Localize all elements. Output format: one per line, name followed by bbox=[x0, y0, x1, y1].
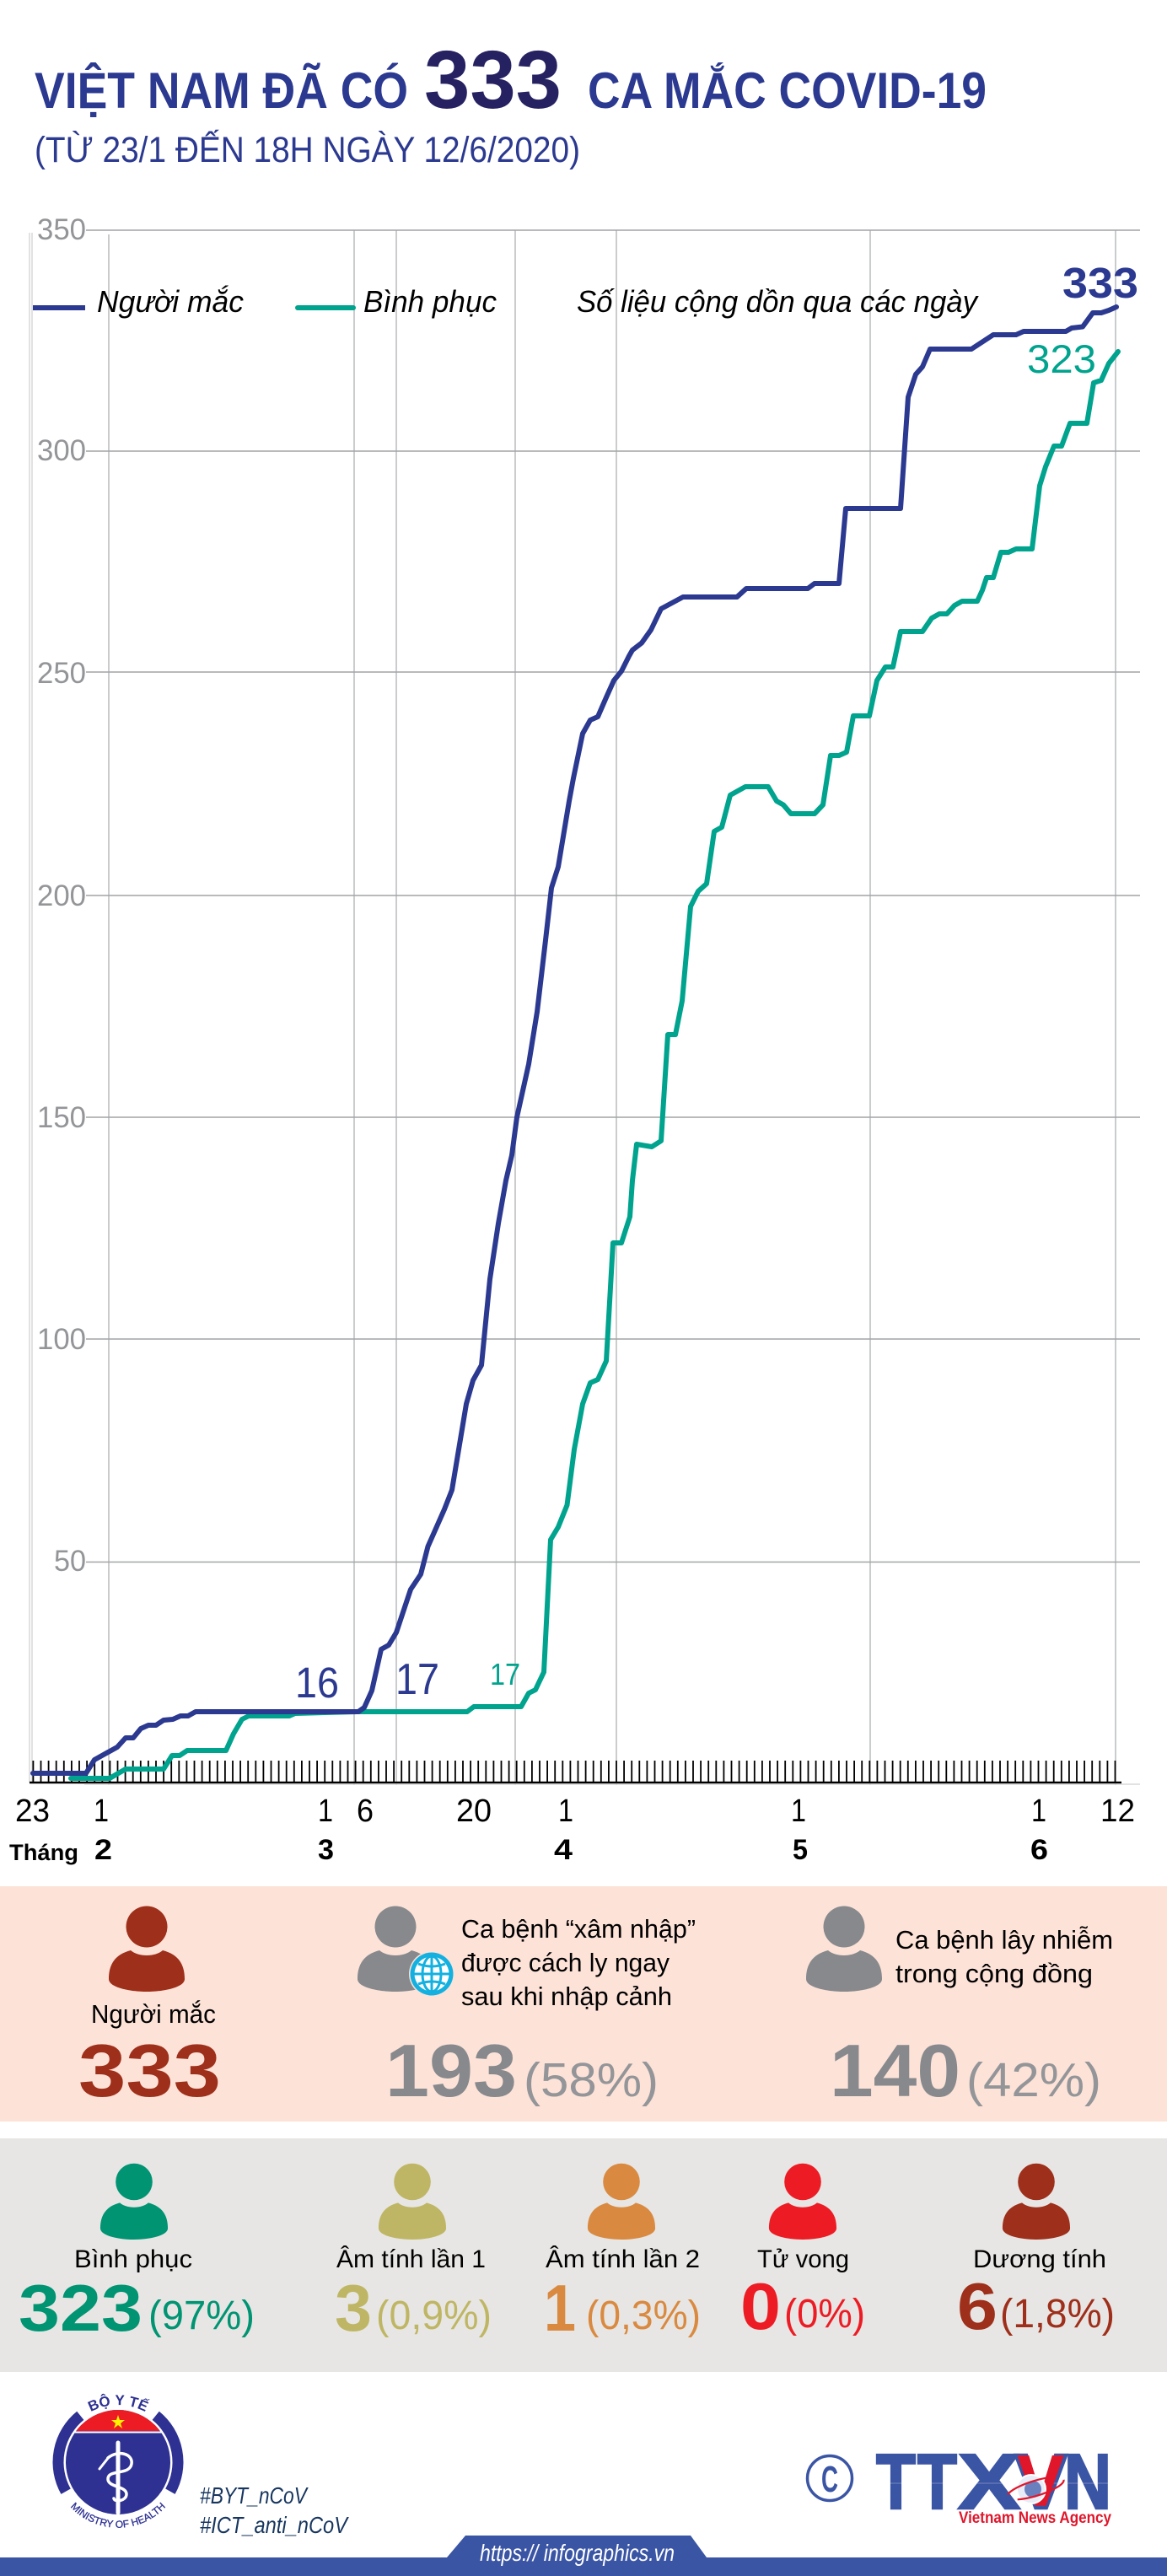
text: imported cases: Ca bệnh “xâm nhập” bbox=[461, 1914, 696, 1944]
logo: ministry of health bbox=[52, 2393, 184, 2528]
number: 193 bbox=[385, 2029, 659, 2112]
stat: negative twice: 1 bbox=[544, 2271, 576, 2345]
stat: negative twice: (0,3%) bbox=[586, 2294, 701, 2338]
x axis day labels: 6 bbox=[357, 1794, 374, 1829]
text: community cases bbox=[895, 1925, 1113, 1988]
logo: TTXVN: Vietnam News Agency bbox=[959, 2509, 1111, 2527]
stat: positive: (1,8%) bbox=[1000, 2292, 1115, 2337]
x axis month labels bbox=[9, 1834, 1048, 1866]
number: 140: 140 bbox=[830, 2029, 960, 2112]
logo: ministry of health: MINISTRY OF HEALTH bbox=[71, 2503, 165, 2528]
x axis month labels: Tháng bbox=[9, 1840, 78, 1865]
hashtags bbox=[200, 2482, 349, 2538]
panel: total cases bbox=[0, 1886, 1167, 2122]
stat: recovered bbox=[19, 2164, 255, 2345]
line chart bbox=[9, 213, 1140, 1866]
number: 333: 333 bbox=[78, 2029, 221, 2112]
logo: TTXVN: X bbox=[958, 2438, 1020, 2525]
x axis day labels: 12 bbox=[1100, 1794, 1135, 1829]
x axis month labels: 2 bbox=[94, 1834, 112, 1866]
x axis ticks bbox=[30, 1772, 1140, 1784]
number: 140 bbox=[830, 2029, 1101, 2112]
icon: copyright bbox=[808, 2455, 852, 2501]
y axis labels: 100 bbox=[37, 1323, 86, 1356]
icon: person with globe bbox=[358, 1906, 454, 1997]
y axis labels: 300 bbox=[37, 434, 86, 467]
x axis day labels: 1 bbox=[1031, 1794, 1046, 1829]
text: imported cases bbox=[461, 1914, 696, 2011]
x axis day labels: 1 bbox=[791, 1794, 806, 1829]
hashtags: #ICT_anti_nCoV bbox=[200, 2512, 349, 2538]
title: VIỆT NAM ĐÃ CÓ bbox=[35, 62, 408, 119]
x axis day labels bbox=[15, 1794, 1135, 1829]
title bbox=[35, 34, 987, 126]
title: CA MẮC COVID-19 bbox=[588, 62, 987, 119]
website url: https:// infographics.vn bbox=[480, 2540, 675, 2566]
number: 140: (42%) bbox=[966, 2053, 1101, 2107]
text: imported cases: được cách ly ngay bbox=[461, 1948, 670, 1977]
panel: outcomes bbox=[0, 2138, 1167, 2372]
logo: TTXVN bbox=[876, 2438, 1111, 2527]
chart note: Số liệu cộng dồn qua các ngày bbox=[577, 284, 979, 319]
subtitle: (TỪ 23/1 ĐẾN 18H NGÀY 12/6/2020) bbox=[35, 130, 580, 170]
stat: negative once: (0,9%) bbox=[376, 2294, 492, 2338]
value label 333: 333 bbox=[1062, 259, 1138, 307]
stat: negative once: Âm tính lần 1 bbox=[336, 2245, 486, 2273]
icon: copyright: C bbox=[821, 2459, 838, 2500]
logo: ministry of health: BỘ Y TẾ bbox=[88, 2393, 150, 2412]
icon: person red bbox=[109, 1906, 185, 1992]
text: community cases: trong cộng đồng bbox=[895, 1959, 1093, 1988]
value label 16: 16 bbox=[295, 1659, 339, 1707]
line: recovered bbox=[71, 352, 1118, 1778]
stat: deaths: Tử vong bbox=[757, 2245, 849, 2273]
stat: positive bbox=[957, 2164, 1115, 2343]
number: 193: (58%) bbox=[524, 2053, 659, 2107]
y axis labels bbox=[37, 213, 86, 1578]
value label 323: 323 bbox=[1027, 336, 1096, 381]
x axis day labels: 1 bbox=[94, 1794, 109, 1829]
line: cases bbox=[33, 307, 1116, 1773]
x axis month labels: 3 bbox=[318, 1834, 334, 1866]
icon: person gray bbox=[806, 1906, 882, 1992]
stat: negative twice bbox=[544, 2164, 701, 2345]
x axis month labels: 6 bbox=[1030, 1834, 1048, 1866]
value label 17 recovered: 17 bbox=[490, 1657, 520, 1691]
x axis month labels: 5 bbox=[793, 1834, 808, 1866]
y axis labels: 150 bbox=[37, 1101, 86, 1134]
x axis day labels: 23 bbox=[15, 1794, 50, 1829]
x axis day labels: 1 bbox=[318, 1794, 333, 1829]
text: imported cases: sau khi nhập cảnh bbox=[461, 1982, 672, 2011]
logo: TTXVN: T bbox=[917, 2438, 957, 2525]
logo: TTXVN: N bbox=[1064, 2438, 1111, 2525]
stat: recovered: 323 bbox=[19, 2271, 143, 2345]
legend: recovered: Bình phục bbox=[363, 284, 497, 319]
stat: recovered: Bình phục bbox=[74, 2245, 192, 2273]
stat: negative twice: Âm tính lần 2 bbox=[546, 2245, 700, 2273]
stat: deaths: (0%) bbox=[784, 2292, 865, 2337]
logo: TTXVN: V bbox=[1018, 2441, 1063, 2520]
legend: cases: Người mắc bbox=[97, 284, 244, 319]
logo: TTXVN: V bbox=[1014, 2438, 1068, 2525]
label: cases: Người mắc bbox=[91, 1999, 216, 2029]
logo: TTXVN: T bbox=[876, 2438, 916, 2525]
text: community cases: Ca bệnh lây nhiễm bbox=[895, 1925, 1113, 1955]
x axis day labels: 20 bbox=[456, 1794, 492, 1829]
stat: negative once: 3 bbox=[335, 2271, 372, 2345]
stat: deaths: 0 bbox=[740, 2269, 781, 2343]
stat: deaths bbox=[740, 2164, 865, 2343]
y axis labels: 200 bbox=[37, 879, 86, 912]
stat: negative once bbox=[335, 2164, 492, 2345]
x axis month labels: 4 bbox=[554, 1834, 573, 1866]
y axis labels: 350 bbox=[37, 213, 86, 246]
stat: positive: Dương tính bbox=[973, 2245, 1106, 2273]
number: 193: 193 bbox=[385, 2029, 517, 2112]
title: 333 bbox=[424, 34, 562, 126]
stat: recovered: (97%) bbox=[148, 2294, 255, 2338]
hashtags: #BYT_nCoV bbox=[200, 2482, 309, 2509]
x axis day labels: 1 bbox=[558, 1794, 573, 1829]
footer bar bbox=[0, 2536, 1167, 2576]
y axis labels: 50 bbox=[54, 1545, 86, 1578]
y axis labels: 250 bbox=[37, 657, 86, 690]
stat: positive: 6 bbox=[957, 2269, 998, 2343]
value label 17: 17 bbox=[395, 1655, 439, 1704]
